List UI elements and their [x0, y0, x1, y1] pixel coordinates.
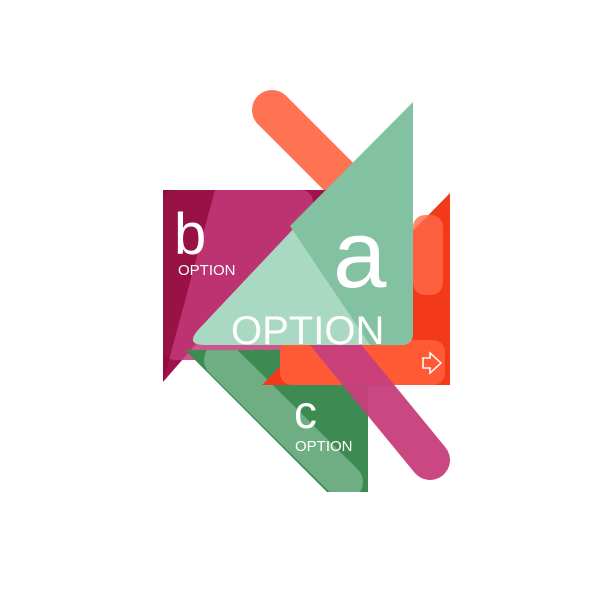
label: option a: OPTION	[231, 309, 384, 353]
panel: option b magenta	[163, 190, 330, 382]
label: a: a	[333, 201, 387, 308]
panel: option a green triangle	[193, 102, 413, 353]
icon: arrow	[423, 353, 441, 373]
bar: orange diagonal	[272, 110, 352, 190]
bar: magenta diagonal	[325, 332, 430, 460]
panel: option red	[262, 193, 450, 385]
panel: option c green	[185, 350, 368, 492]
label: c: c	[294, 386, 317, 438]
infographic	[163, 90, 450, 492]
label: option c: OPTION	[295, 438, 353, 455]
label: option b: OPTION	[178, 262, 236, 279]
label: b: b	[174, 202, 206, 267]
